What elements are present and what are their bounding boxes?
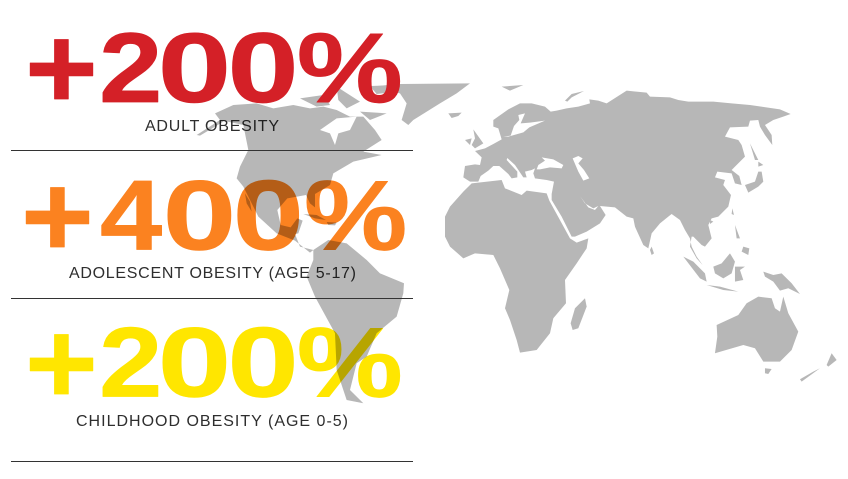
caspian sea bbox=[573, 156, 589, 181]
figure +200% yellow: % bbox=[297, 308, 403, 418]
map: americas and greenland bbox=[197, 83, 470, 403]
novaya zemlya bbox=[565, 91, 584, 102]
sakhalin bbox=[750, 143, 758, 160]
label adult obesity: ADULT OBESITY bbox=[145, 118, 279, 135]
greenland bbox=[370, 83, 470, 125]
south america bbox=[307, 240, 404, 403]
black sea bbox=[537, 157, 563, 169]
sulawesi bbox=[735, 267, 745, 282]
figure +400% orange: 4 bbox=[100, 160, 162, 271]
figure +200% yellow: 0 bbox=[158, 307, 231, 418]
philippines bbox=[735, 225, 740, 238]
stat: childhood obesity bbox=[25, 296, 403, 430]
figure +200% red: 2 bbox=[99, 12, 162, 123]
figure +200% yellow: + bbox=[25, 296, 98, 428]
figure +200% red: % bbox=[297, 13, 403, 124]
cuba bbox=[303, 214, 326, 220]
world map bbox=[197, 83, 837, 403]
figure +200% yellow bbox=[25, 296, 403, 428]
madagascar bbox=[571, 298, 587, 330]
figure +200% red: 0 bbox=[228, 13, 299, 124]
hudson bay bbox=[320, 117, 357, 145]
svalbard bbox=[502, 85, 523, 91]
stat: adult obesity bbox=[25, 1, 403, 135]
new guinea bbox=[763, 272, 800, 294]
figure +400% orange: % bbox=[304, 160, 407, 271]
africa bbox=[445, 180, 588, 353]
label adolescent obesity: ADOLESCENT OBESITY (AGE 5-17) bbox=[69, 265, 356, 282]
stat: adolescent obesity bbox=[21, 149, 407, 282]
java bbox=[707, 285, 738, 292]
figure +400% orange: 0 bbox=[233, 160, 304, 271]
australia bbox=[715, 297, 798, 362]
north america bbox=[215, 103, 382, 253]
baja california bbox=[245, 193, 252, 212]
ireland bbox=[465, 138, 472, 145]
figure +200% red: 0 bbox=[158, 12, 231, 123]
figure +200% yellow: 2 bbox=[99, 307, 162, 418]
figure +200% red bbox=[25, 1, 403, 133]
arctic islands bbox=[300, 95, 330, 107]
new zealand bbox=[827, 353, 837, 367]
figure +400% orange bbox=[21, 149, 407, 281]
figure +400% orange: + bbox=[21, 149, 94, 281]
hispaniola bbox=[327, 222, 337, 225]
label childhood obesity: CHILDHOOD OBESITY (AGE 0-5) bbox=[76, 413, 348, 430]
figure +200% yellow: 0 bbox=[228, 307, 299, 418]
taiwan bbox=[732, 208, 734, 215]
figure +200% red: + bbox=[25, 1, 98, 133]
iceland bbox=[448, 113, 462, 118]
sri lanka bbox=[650, 247, 654, 255]
hainan bbox=[710, 220, 713, 224]
japan bbox=[745, 172, 763, 193]
persian gulf bbox=[580, 196, 598, 210]
eurasia bbox=[463, 91, 791, 265]
tasmania bbox=[765, 368, 772, 374]
borneo bbox=[713, 253, 735, 278]
map: eastern hemisphere bbox=[445, 85, 837, 382]
aleutian tail bbox=[197, 120, 223, 136]
figure +400% orange: 0 bbox=[163, 160, 236, 271]
united kingdom bbox=[472, 129, 483, 148]
sumatra bbox=[683, 257, 707, 282]
baltic sea bbox=[503, 113, 545, 137]
